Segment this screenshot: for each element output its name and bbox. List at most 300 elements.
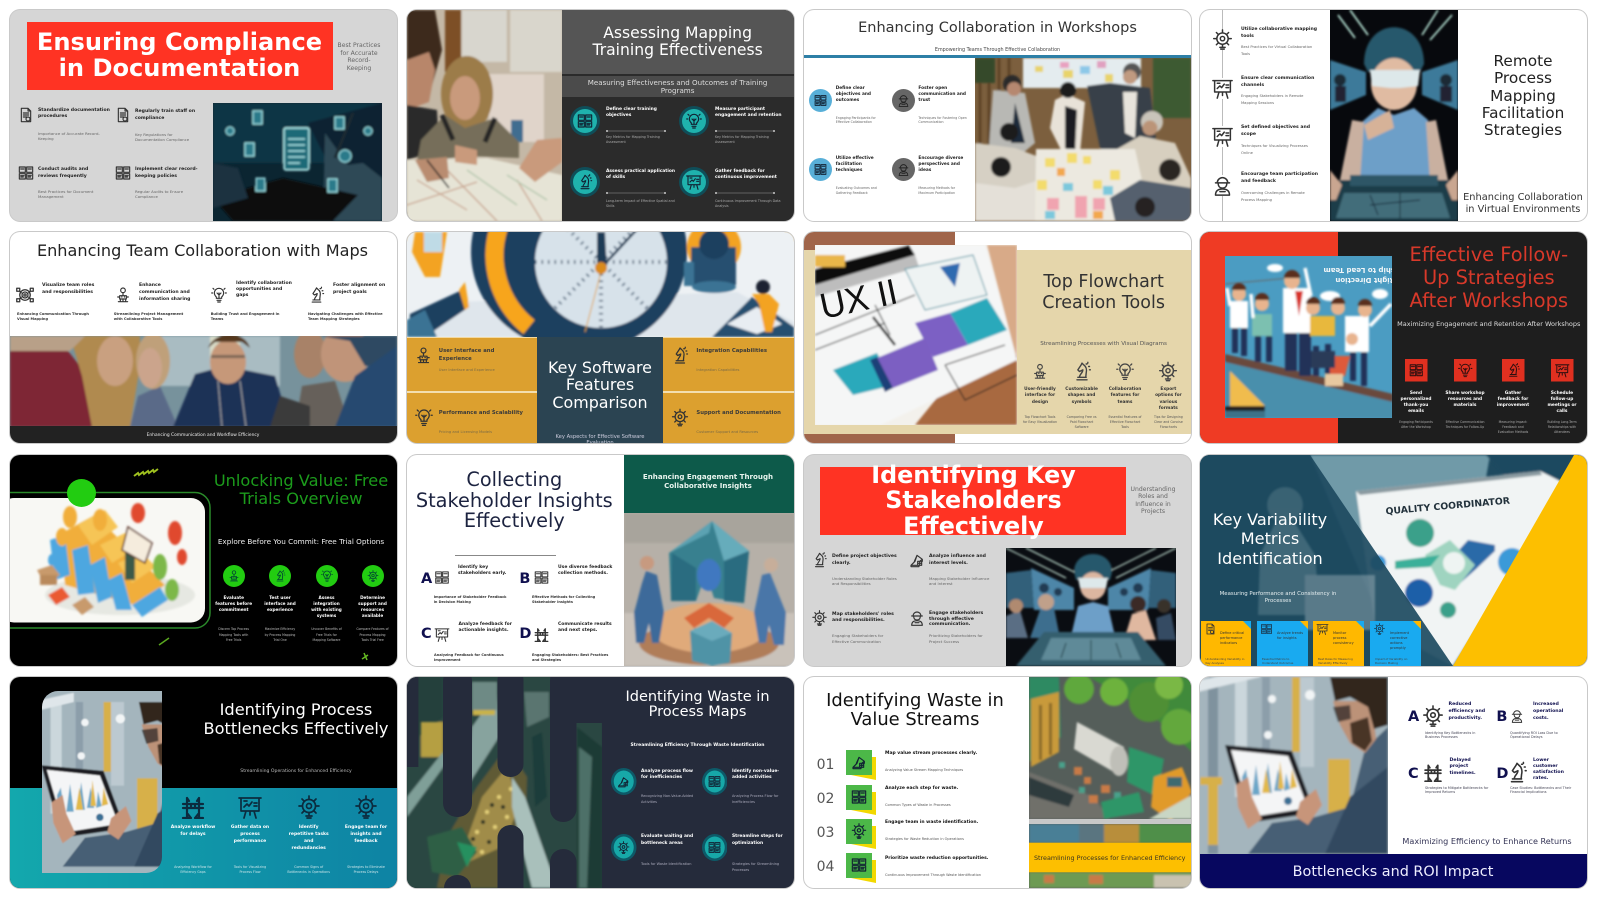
card corner (1356, 621, 1364, 629)
letter A: A (421, 570, 432, 586)
item note: Improved Returns (1425, 790, 1455, 794)
item heading (1497, 391, 1529, 409)
icon: monitor (1315, 623, 1330, 635)
panel: Enhancing Team Collaboration with Maps (10, 232, 397, 443)
item note (17, 312, 89, 322)
item note: Financial Implications (1510, 790, 1546, 794)
item heading: through effective (929, 617, 974, 622)
item note: Tools Trial Free (361, 638, 384, 642)
item heading: features before (215, 601, 252, 606)
timeline rule (1222, 10, 1223, 220)
item note: Importance of Stakeholder Feedback (434, 595, 506, 599)
item heading: channels (1241, 82, 1264, 88)
icon: participant engagement (679, 106, 709, 136)
subtitle (338, 42, 380, 72)
item note: Effective Communication (1446, 420, 1484, 424)
item heading: operational (1533, 709, 1563, 714)
item heading: Evaluate (223, 595, 244, 600)
item note (1547, 420, 1577, 435)
item heading: interface for (1025, 393, 1055, 398)
item note (918, 186, 955, 195)
item note (174, 865, 212, 875)
item heading: for inefficiencies (641, 775, 682, 780)
item note: Enhancing Communication Through (17, 312, 89, 316)
footer band (10, 426, 397, 443)
item heading: Identify non-value- (732, 769, 779, 774)
inverted banner text (1323, 266, 1394, 284)
item heading (264, 595, 296, 613)
item heading: Lower (1533, 758, 1549, 762)
icon: engaged person (909, 610, 925, 626)
item heading: Map stakeholders' roles (832, 612, 894, 616)
card text (1333, 630, 1354, 646)
title: Identifying Process (220, 700, 372, 718)
item heading: feedback for (1498, 397, 1528, 402)
item heading: follow-up (1551, 397, 1573, 402)
item note: Mapping Sessions (1241, 101, 1274, 105)
item heading: Identify collaboration (236, 281, 292, 286)
title panel (537, 337, 663, 443)
panel: Identifying Waste in Value Streams (804, 677, 1191, 888)
footer title: Bottlenecks and ROI Impact (1293, 864, 1493, 880)
subtitle (1131, 486, 1175, 516)
item heading: efficiency and (1448, 709, 1485, 714)
item note: Overcoming Challenges in Remote (1241, 191, 1305, 195)
item note: Building Long-Term (1547, 420, 1577, 424)
item note: Evaluating Outcomes and (836, 186, 877, 190)
title: Training Effectiveness (592, 41, 763, 59)
item note: Techniques for Visualizing Processes (1241, 144, 1308, 148)
item note: Understanding Stakeholder Roles (832, 576, 897, 581)
item note: Operational Delays (1510, 735, 1542, 739)
item note: Engaging Participants (1399, 420, 1433, 424)
icon: communication table (533, 626, 550, 642)
item note: with Collaborative Tools (114, 317, 162, 321)
card corner (1412, 621, 1420, 629)
title: Key Variability (1213, 510, 1327, 529)
icon: target roles (16, 286, 34, 304)
step number 02: 02 (817, 791, 834, 807)
item: gather feedback: continuous improvement (715, 175, 777, 180)
item heading (1448, 702, 1485, 723)
step badge 1 (846, 750, 876, 780)
photo: engineer with tablet (1200, 677, 1388, 854)
item note: Mapping Tools with (219, 633, 248, 637)
item heading (171, 824, 215, 838)
icon: feedback square (1502, 359, 1524, 382)
item heading: rates. (1533, 776, 1548, 781)
item note: Team Mapping Strategies (308, 317, 360, 321)
item note (1498, 420, 1528, 435)
item note (1241, 143, 1308, 156)
item heading: Gather (1505, 391, 1521, 396)
step badge 2 (846, 784, 876, 814)
item note (218, 627, 249, 643)
item heading: interest levels. (929, 561, 968, 566)
item: assess application: of skills (606, 175, 625, 180)
item note (356, 627, 389, 643)
card note: Impact of Variability on (1375, 657, 1407, 661)
item heading: Gather data on (231, 825, 269, 830)
item heading (732, 769, 779, 782)
metric card: define indicators (1200, 621, 1250, 666)
item note: Uncover Benefits of (311, 627, 342, 631)
subtitle: Key Aspects for Effective Software (556, 434, 644, 440)
item heading: Customizable (1065, 387, 1098, 392)
card note: Understanding Variability in (1206, 657, 1244, 661)
item: define objectives: Define clear (836, 86, 865, 90)
item heading: keeping policies (135, 174, 177, 179)
title: Effectively (464, 509, 565, 532)
item heading: experience (267, 607, 293, 612)
step heading: Map value stream processes clearly. (885, 751, 977, 756)
item heading: support and (358, 601, 387, 606)
item heading (38, 108, 110, 119)
item: define objectives: Define clear training (606, 106, 657, 112)
title: Stakeholders (885, 486, 1062, 514)
item heading (135, 108, 195, 121)
item note: Mapping Stakeholder Influence (929, 576, 989, 581)
card text (1277, 630, 1303, 641)
item note: Effective Flowchart (1110, 420, 1140, 424)
subtitle (1220, 591, 1336, 605)
divider with dots (606, 192, 666, 194)
step note: Analyzing Value Stream Mapping Techniques (885, 768, 963, 772)
item heading (345, 824, 387, 845)
item: foster communication: Foster open (918, 86, 947, 90)
item heading: Delayed (1450, 758, 1471, 762)
letter B: B (519, 570, 530, 586)
icon: objectives badge (809, 89, 832, 112)
item heading: satisfaction (1533, 770, 1564, 775)
subtitle (556, 434, 644, 446)
item note (532, 652, 608, 662)
card note: Best Rules for Measuring (1318, 657, 1353, 661)
title (1410, 243, 1568, 312)
item note: Processes (732, 868, 749, 872)
letter D: D (519, 626, 531, 642)
item note: Analysis (715, 204, 729, 208)
item heading: repetitive tasks (289, 832, 329, 837)
item note: in Decision Making (434, 600, 471, 604)
subtitle: Keeping (347, 65, 371, 72)
item heading (1533, 702, 1563, 723)
icon: diverse perspectives badge (892, 158, 915, 180)
item heading: User-friendly (1024, 387, 1056, 392)
item note (836, 116, 876, 124)
item heading: Analyze workflow (171, 825, 215, 830)
item heading: timelines. (1450, 771, 1476, 776)
item note: Navigating Challenges with Effective (308, 312, 383, 316)
item note (1425, 786, 1488, 795)
item note: Engaging Stakeholders: Best Practices (532, 652, 608, 656)
item note (732, 793, 778, 805)
card note (1206, 657, 1244, 666)
item heading: optimization (732, 841, 763, 846)
item heading (1445, 391, 1485, 409)
icon: efficiency gear (1422, 705, 1444, 727)
item heading: Ensure clear communication (1241, 76, 1314, 80)
item heading (1547, 391, 1577, 415)
rule under title (455, 555, 556, 556)
item heading: communication and (139, 290, 190, 295)
item heading: Evaluate waiting and (641, 834, 693, 839)
item heading: process (240, 832, 260, 837)
photo: remote facilitator with helmet (1330, 10, 1458, 220)
item: define objectives: outcomes (836, 98, 859, 102)
metric card: monitor consistency (1313, 621, 1364, 666)
icon: communication chart (1212, 78, 1233, 98)
item note (1154, 415, 1183, 430)
item heading: customer (1533, 764, 1558, 769)
item heading: and responsibilities. (832, 618, 885, 623)
item note (1510, 731, 1558, 740)
item heading: opportunities and (236, 287, 282, 292)
item heading: meetings or (1547, 403, 1577, 408)
item note: Discern Top Process (218, 627, 249, 631)
item heading: project (1450, 764, 1468, 769)
icon: collaboration gear (1212, 28, 1233, 50)
icon: corrective gear (1372, 623, 1387, 635)
item heading: various (1159, 400, 1177, 405)
title: Effectively (903, 512, 1044, 540)
item heading: and next steps. (558, 628, 597, 633)
item heading: and feedback (1241, 179, 1276, 184)
step heading: Engage team in waste identification. (885, 820, 978, 825)
item heading: available (362, 613, 383, 618)
small dash accent (158, 636, 170, 646)
item heading (1065, 387, 1098, 406)
item note (929, 576, 989, 587)
item note: Common Signs of (294, 865, 323, 869)
item heading: Send (1410, 391, 1422, 396)
item: foster communication: trust (918, 98, 930, 102)
item: encourage perspectives: ideas (918, 168, 931, 173)
subtitle: Measuring Performance and Consistency in (1220, 591, 1336, 597)
item heading: personalized (1400, 397, 1432, 402)
item note: Effective Communication (832, 639, 881, 644)
item heading: calls (1557, 409, 1567, 414)
tagline: Maximizing Efficiency to Enhance Returns (1402, 836, 1572, 846)
footer band (1200, 854, 1587, 888)
item heading (1155, 387, 1182, 412)
item note (641, 793, 693, 805)
item heading: Visualize team roles (42, 283, 94, 288)
item note: Bottlenecks in Operations (287, 870, 330, 874)
item heading (1241, 171, 1318, 185)
item heading (42, 282, 94, 296)
left lower separator (407, 391, 537, 393)
panel: Bottlenecks and ROI Impact (1200, 677, 1587, 888)
item note: Assessment (606, 140, 626, 144)
icon: team participant (1212, 175, 1233, 196)
title (204, 700, 388, 738)
card note (1375, 657, 1407, 666)
title: Unlocking Value: Free (214, 470, 388, 490)
title (826, 690, 1004, 728)
title: After Workshops (1410, 289, 1568, 312)
title: Up Strategies (1423, 266, 1555, 289)
item heading (641, 834, 693, 847)
brown top corner (804, 232, 955, 250)
subtitle: Roles and (1138, 493, 1168, 500)
item note: Clear and Concise (1154, 420, 1183, 424)
item note (836, 186, 877, 195)
item note: Inefficiencies (732, 800, 755, 804)
icon: data board (238, 795, 262, 819)
item heading: for delays (180, 832, 206, 837)
item note: Flowcharts (1160, 425, 1177, 429)
title: Process (1494, 69, 1552, 87)
item note: Effective Methods for Collecting (532, 595, 595, 599)
subtitle: Best Practices (338, 42, 380, 49)
cross accent (361, 652, 370, 660)
letter A: A (1408, 709, 1419, 725)
icon: interface robot (415, 345, 432, 366)
title: Remote (1493, 52, 1553, 70)
item note: Regular Audits to Ensure (135, 188, 183, 194)
item note (347, 865, 385, 875)
panel: Identifying Process Bottlenecks Effectively (10, 677, 397, 888)
panel: Remote Process Mapping Facilitation Strategies (1200, 10, 1587, 220)
item note: Keeping (38, 136, 54, 141)
item note: Best Practices for Document (38, 188, 93, 194)
subtitle: Empowering Teams Through Effective Collaboration (935, 46, 1060, 52)
subtitle: Projects (1141, 508, 1165, 515)
grey strip (1029, 819, 1192, 824)
subtitle: Record- (347, 57, 371, 64)
item heading (1450, 758, 1476, 778)
item heading: Define project objectives (832, 554, 897, 559)
card note (1318, 657, 1353, 666)
title: Ensuring Compliance (37, 28, 322, 56)
item heading: Streamline steps for (732, 834, 783, 839)
subtitle: in Virtual Environments (1466, 204, 1580, 215)
panel: Collecting Stakeholder Insights Effectively (407, 454, 794, 666)
item heading (236, 281, 292, 300)
card note: Decision Making (1375, 661, 1398, 665)
photo: workshop from above (975, 58, 1191, 221)
item heading: symbols (1072, 400, 1092, 405)
item note: Attendees (1554, 430, 1570, 434)
icon: follow-up square (1551, 359, 1574, 382)
step heading: Prioritize waste reduction opportunities. (885, 856, 988, 861)
photo: glowing policy clipboard (213, 103, 382, 221)
letter B: B (1496, 709, 1507, 725)
icon: email square (1405, 359, 1428, 382)
item note: Stakeholder Insights (532, 600, 573, 604)
item heading: Test user (269, 595, 291, 600)
item heading (289, 824, 329, 852)
item note: Improvement (434, 658, 460, 662)
item heading: procedures (38, 114, 67, 119)
card text: Implement (1390, 630, 1409, 634)
item note: Efficiency Gaps (180, 870, 206, 874)
subtitle: Streamlining Efficiency Through Waste Identification (631, 743, 764, 748)
icon: shapes (1072, 361, 1092, 382)
step note: Continuous Improvement Through Waste Identification (885, 872, 981, 876)
item heading (1241, 124, 1310, 138)
item heading: design (1032, 400, 1048, 405)
icon: indicators (1202, 623, 1218, 635)
step note: Common Types of Waste in Processes (885, 803, 951, 807)
panel: Top Flowchart Creation Tools (804, 232, 1191, 443)
item heading (832, 554, 897, 568)
metric card: analyze trends (1257, 621, 1308, 666)
step number 04: 04 (817, 859, 834, 875)
item heading: Set defined objectives and (1241, 125, 1310, 130)
item heading: redundancies (292, 846, 326, 851)
icon: communication robot (115, 286, 131, 304)
icon: opportunities hand (211, 286, 227, 304)
subtitle: Maximizing Engagement and Retention After Workshops (1397, 320, 1580, 328)
item heading (311, 595, 342, 619)
icon: training objectives (570, 106, 600, 136)
photo: quality coordinator certificate (1200, 454, 1587, 666)
photo: engineer with tablet (42, 691, 162, 873)
icon: bridge workflow (181, 795, 205, 819)
item note: Process Mapping (359, 633, 385, 637)
item note: and Interest (929, 581, 953, 586)
divider with dots (606, 130, 666, 132)
icon: feedback board (679, 167, 709, 197)
photo: recycling line cut into pillars (407, 677, 602, 888)
item note: Recognizing Non-Value-Added (641, 794, 693, 798)
item note: Customer Support and Resources (696, 430, 758, 434)
item heading: communication. (929, 622, 970, 627)
title: Features (566, 375, 634, 394)
item note: Prioritizing Stakeholders for (929, 633, 983, 638)
item note (1241, 190, 1305, 203)
item note: Tools for Waste Identification (641, 862, 691, 866)
item heading: reviews frequently (38, 174, 87, 179)
title: Identifying Waste in (625, 688, 770, 704)
item note: Tools (1241, 52, 1250, 56)
title: Comparison (552, 393, 648, 412)
item note (1425, 731, 1475, 740)
letter C: C (421, 626, 432, 642)
title: Top Flowchart (1043, 272, 1164, 292)
item heading: with existing (311, 607, 342, 612)
card text (1220, 630, 1244, 646)
panel: Assessing Mapping Training Effectiveness (407, 10, 794, 220)
item: gather feedback: Gather feedback for (715, 168, 765, 174)
item note (287, 865, 330, 875)
item note (434, 652, 504, 662)
icon: stakeholder map (434, 570, 450, 585)
subtitle band (562, 76, 794, 96)
item note: Strategies for Streamlining (732, 862, 779, 866)
card text: process (1333, 636, 1346, 640)
title (1482, 53, 1564, 139)
title: Assessing Mapping (603, 24, 752, 42)
panel: Identifying Key Stakeholders Effectively (804, 454, 1191, 666)
item heading: improvement (1497, 403, 1529, 408)
item note: Key Regulations for (135, 132, 173, 136)
item heading: clearly. (832, 561, 851, 566)
item heading: Collaboration (1109, 387, 1141, 392)
header text (643, 473, 773, 490)
item note: Essential Features of (1108, 415, 1142, 419)
title: Bottlenecks Effectively (204, 718, 388, 738)
item heading: Experience (439, 356, 472, 362)
item heading: Performance and Scalability (439, 410, 523, 416)
item: assess application (606, 168, 675, 180)
item heading: and (304, 839, 313, 844)
panel: Key Variability Metrics Identification (1200, 454, 1587, 666)
item heading (139, 282, 190, 303)
item note: Documentation Compliance (135, 137, 189, 142)
